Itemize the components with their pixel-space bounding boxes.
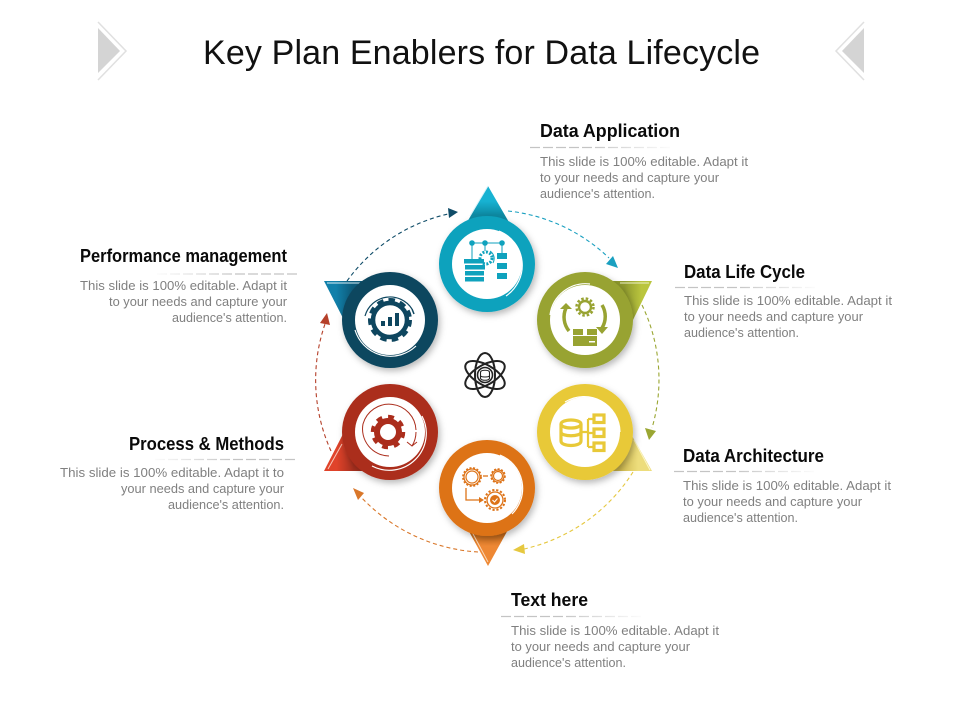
icon: right title chevron bbox=[836, 22, 864, 80]
text block: Performance management description bbox=[80, 279, 288, 325]
text block: Performance management description: to your needs and capture your bbox=[109, 295, 287, 309]
text block: Performance management description: audience's attention. bbox=[172, 311, 287, 325]
text block: Data Life Cycle description: to your needs and capture your bbox=[684, 310, 863, 324]
text block: Data Life Cycle description: audience's attention. bbox=[684, 326, 799, 340]
panel: yellow node bbox=[537, 384, 652, 480]
arrow: olive arc to yellow bbox=[642, 305, 659, 440]
panel: Text here text bbox=[501, 590, 720, 670]
heading: Data Life Cycle: Data Life Cycle bbox=[684, 262, 805, 282]
heading: Process & Methods: Process & Methods bbox=[129, 434, 284, 454]
text block: Data Architecture description: This slide is 100% editable. Adapt it bbox=[683, 479, 892, 493]
panel: Performance management text bbox=[80, 246, 297, 325]
text block: Process & Methods description bbox=[60, 466, 284, 512]
heading: Data Application: Data Application bbox=[540, 121, 680, 141]
text block: Process & Methods description: This slide is 100% editable. Adapt it to bbox=[60, 466, 284, 480]
text block: Text here description: This slide is 100% editable. Adapt it bbox=[511, 624, 720, 638]
panel: Process & Methods text bbox=[60, 434, 295, 512]
text block: Text here description bbox=[511, 624, 720, 670]
panel: Data Application text bbox=[530, 121, 749, 201]
icon: central atom bbox=[461, 353, 509, 397]
text block: Data Architecture description bbox=[683, 479, 892, 525]
text block: Data Application description: This slide is 100% editable. Adapt it bbox=[540, 155, 749, 169]
text block: Data Life Cycle description: This slide is 100% editable. Adapt it bbox=[684, 294, 893, 308]
panel: olive node bbox=[537, 272, 652, 368]
heading: Performance management: Performance management bbox=[80, 246, 287, 266]
icon: data architecture bbox=[561, 415, 604, 450]
text block: Process & Methods description: audience's attention. bbox=[168, 498, 284, 512]
panel: orange node bbox=[439, 440, 535, 566]
icon: performance gear bbox=[365, 297, 414, 340]
panel: teal node bbox=[439, 186, 535, 312]
panel: navy node bbox=[324, 272, 438, 368]
text block: Data Application description bbox=[540, 155, 749, 201]
text block: Data Life Cycle description bbox=[684, 294, 893, 340]
text block: Data Application description: to your needs and capture your bbox=[540, 171, 719, 185]
panel: Data Architecture text bbox=[674, 446, 892, 525]
text block: Performance management description: This slide is 100% editable. Adapt it bbox=[80, 279, 288, 293]
text block: Text here description: audience's attention. bbox=[511, 656, 626, 670]
icon: process gears bbox=[463, 468, 505, 510]
title: Key Plan Enablers for Data Lifecycle bbox=[203, 34, 760, 72]
text block: Data Architecture description: audience's attention. bbox=[683, 511, 798, 525]
panel: red node bbox=[324, 384, 438, 480]
icon: left title chevron bbox=[98, 22, 126, 80]
text block: Data Application description: audience's attention. bbox=[540, 187, 655, 201]
arrow: red arc to navy bbox=[316, 313, 331, 451]
icon: data application bbox=[464, 240, 507, 282]
icon: data life cycle bbox=[560, 298, 608, 346]
arrow: teal arc to olive bbox=[508, 211, 618, 268]
arrow: orange arc to red bbox=[353, 488, 478, 552]
text block: Process & Methods description: your needs and capture your bbox=[121, 482, 284, 496]
arrow: navy arc to teal bbox=[347, 208, 458, 281]
heading: Text here: Text here bbox=[511, 590, 588, 610]
panel: Data Life Cycle text bbox=[675, 262, 893, 340]
heading: Data Architecture: Data Architecture bbox=[683, 446, 824, 466]
text block: Text here description: to your needs and capture your bbox=[511, 640, 690, 654]
text block: Data Architecture description: to your needs and capture your bbox=[683, 495, 862, 509]
icon: process gear bbox=[363, 404, 417, 456]
arrow: yellow arc to orange bbox=[513, 472, 633, 554]
